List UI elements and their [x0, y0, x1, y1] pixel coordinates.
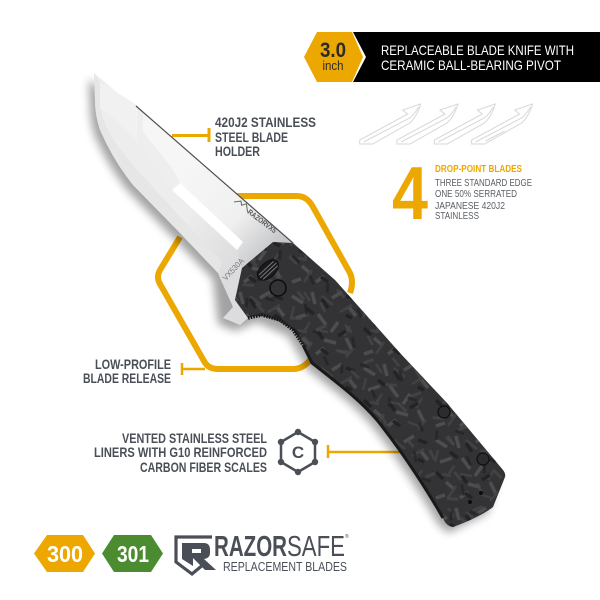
- wordmark safe: SAFE: [287, 531, 345, 563]
- jimping: [248, 315, 303, 345]
- blade outline two: [397, 104, 458, 144]
- lanyard holes: [468, 491, 483, 504]
- blade body: [94, 73, 293, 325]
- callout line four: STAINLESS: [435, 210, 479, 222]
- leader: blade holder: [172, 128, 209, 142]
- RazorSafe logo: [176, 531, 349, 574]
- logo shield: [176, 537, 212, 574]
- callout line one: THREE STANDARD EDGE: [435, 177, 532, 189]
- blade bright fuller: [172, 183, 243, 250]
- blade logo: [232, 197, 278, 235]
- rear screw two: [477, 453, 489, 465]
- blade grind recess: [137, 106, 180, 190]
- label: blade release: LOW-PROFILE: [95, 356, 171, 372]
- series badge 301: 301: [117, 541, 149, 567]
- label: scales: CARBON FIBER SCALES: [140, 459, 267, 475]
- leader: blade release: [182, 363, 205, 375]
- knife shadow: [89, 79, 498, 533]
- size badge hexagon: [304, 32, 363, 82]
- callout line three: JAPANESE 420J2: [435, 200, 505, 212]
- icon: carbon hexagon: C: [292, 443, 304, 462]
- yellow hexagon frame: [158, 196, 352, 369]
- logo letter R: [182, 543, 216, 570]
- icon: carbon hexagon: [278, 429, 318, 475]
- blade flat face: [136, 106, 293, 268]
- label: blade holder: STEEL BLADE: [215, 129, 288, 145]
- label: scales: VENTED STAINLESS STEEL: [122, 430, 267, 446]
- series badge 300: [34, 535, 95, 572]
- replacement blades outlines: [360, 104, 533, 144]
- series badge 301: [102, 535, 163, 572]
- blade outline three: [434, 104, 495, 144]
- logo text: RAZORVX5: [246, 207, 278, 235]
- blade belly bevel: [94, 73, 222, 273]
- mountain mark: [234, 197, 251, 212]
- handle scale: [235, 242, 505, 527]
- blade outline one: [360, 104, 421, 144]
- blade outline four serrated: [472, 104, 533, 144]
- label: blade holder: 420J2 STAINLESS: [215, 114, 316, 130]
- label: blade release: [83, 356, 171, 386]
- size unit: inch: [322, 58, 344, 73]
- label: blade holder: HOLDER: [215, 143, 260, 159]
- blade tip face: [100, 82, 137, 142]
- size value: 3.0: [320, 39, 346, 62]
- rear screw one: [438, 406, 450, 418]
- blade model text: VX530A: [221, 256, 246, 282]
- header banner: [304, 32, 600, 82]
- series badge 300: 300: [47, 541, 83, 567]
- pivot screw: [270, 280, 286, 296]
- thumb slot: [254, 256, 282, 284]
- tagline: REPLACEMENT BLADES: [223, 559, 347, 574]
- callout heading: DROP-POINT BLADES: [435, 163, 522, 175]
- wordmark: RAZOR: [214, 531, 287, 563]
- knife illustration: [94, 73, 510, 530]
- carbon fiber texture: [230, 240, 510, 530]
- trademark: ®: [345, 533, 349, 540]
- blade spine edge: [136, 106, 293, 243]
- headline line two: CERAMIC BALL-BEARING PIVOT: [381, 57, 561, 73]
- black title band: [353, 32, 600, 82]
- label: scales: [94, 430, 267, 475]
- leader: scales: [328, 445, 400, 458]
- big number four: 4: [392, 151, 428, 235]
- label: blade release: BLADE RELEASE: [83, 370, 171, 386]
- blade count callout: [392, 151, 532, 235]
- callout line two: ONE 50% SERRATED: [435, 188, 517, 200]
- label: scales: LINERS WITH G10 REINFORCED: [94, 444, 267, 460]
- handle lower edge: [303, 345, 443, 518]
- label: blade holder: [215, 114, 316, 159]
